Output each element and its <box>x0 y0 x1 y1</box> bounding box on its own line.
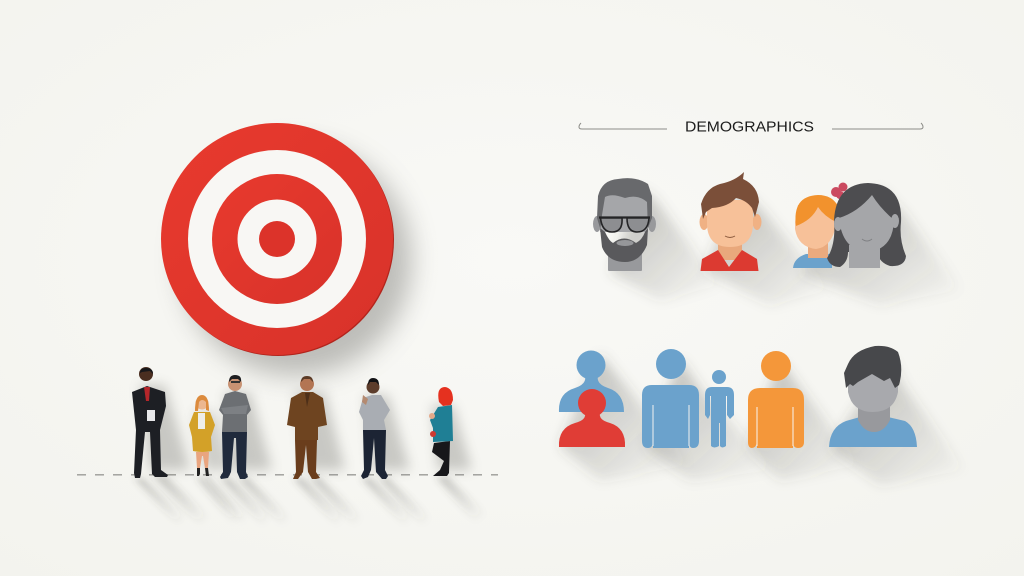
baseline: dashed ground line <box>77 474 498 476</box>
icon: dark-haired person in blue <box>829 346 965 485</box>
person: man in grey sweater <box>219 375 302 532</box>
person: man in light sweater <box>359 378 442 532</box>
icon: overlapping blue and red people <box>559 350 690 480</box>
person: woman in teal with red hair <box>429 387 496 527</box>
person: girl in yellow <box>189 395 258 530</box>
icon: orange person pictogram <box>748 351 860 480</box>
person: man in black suit <box>132 367 222 532</box>
icon: girl and woman pair <box>793 182 960 305</box>
heading: demographics <box>579 120 923 136</box>
icon: bearded man with glasses <box>593 178 720 300</box>
person: man in brown coat <box>287 376 374 532</box>
people group <box>132 367 496 532</box>
sub-icon: woman with dark hair <box>827 183 906 268</box>
heading: demographics: DEMOGRAPHICS <box>685 120 814 136</box>
sub-icon: girl in blue shirt <box>793 195 838 268</box>
target: bullseye <box>161 123 412 376</box>
icon: boy in red shirt <box>700 172 830 305</box>
icon: adult and child pictogram in blue <box>642 349 775 480</box>
sub-icon: hair bow <box>831 182 848 199</box>
